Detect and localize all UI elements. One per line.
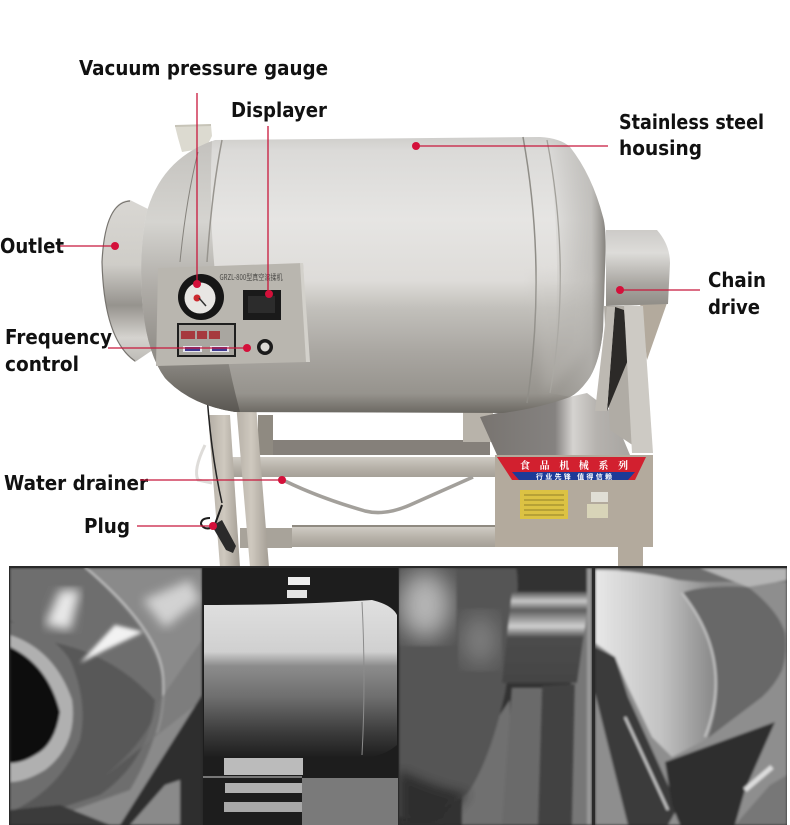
- callout: frequency control: control: [5, 352, 79, 376]
- callout: plug: Plug: [84, 514, 130, 538]
- control cabinet: [480, 393, 653, 566]
- callout: chain drive: [616, 268, 766, 319]
- callout: chain drive: drive: [708, 295, 760, 319]
- photo strip: product details: [9, 566, 790, 825]
- callout: chain drive: Chain: [708, 268, 766, 292]
- callout: water drainer: [4, 471, 286, 495]
- top port: [175, 125, 212, 152]
- callout: outlet: Outlet: [0, 234, 64, 258]
- photo 2: tank side: [203, 568, 398, 825]
- callout: stainless steel housing: [412, 110, 764, 160]
- cabinet banner: 行业先锋 值得信赖: [536, 472, 612, 482]
- callout: frequency control: Frequency: [5, 325, 112, 349]
- frequency controller: [177, 323, 236, 357]
- callout: stainless steel housing: Stainless steel: [619, 110, 764, 134]
- machine: vacuum tumbler: [102, 125, 670, 567]
- stand: frame and legs: [197, 366, 496, 567]
- callout: frequency control: [5, 325, 251, 376]
- callout: vacuum pressure gauge: Vacuum pressure gauge: [79, 56, 328, 80]
- cabinet banner: [497, 457, 646, 482]
- control panel: GRZL-800型真空滚揉机: [220, 272, 282, 283]
- photo 3: shaft housing: [399, 568, 592, 825]
- plug: [201, 505, 236, 553]
- callout: vacuum pressure gauge: [79, 56, 328, 288]
- cabinet banner: 食 品 机 械 系 列: [520, 457, 628, 472]
- callout: water drainer: Water drainer: [4, 471, 148, 495]
- photo 4: tank rear angle: [595, 568, 787, 825]
- callout: displayer: [231, 98, 327, 298]
- pressure gauge: [178, 274, 224, 320]
- rotary knob: [257, 339, 273, 355]
- callout: plug: [84, 514, 217, 538]
- photo 1: tank opening: [10, 567, 202, 825]
- callout: stainless steel housing: housing: [619, 136, 702, 160]
- tank body: [141, 137, 606, 413]
- control panel: [156, 263, 310, 366]
- digital display: [243, 290, 281, 320]
- callout: outlet: [0, 234, 119, 258]
- callout: displayer: Displayer: [231, 98, 327, 122]
- left flange outlet: [102, 200, 160, 362]
- right support and drive shaft: [595, 230, 670, 453]
- warning labels: [520, 490, 608, 519]
